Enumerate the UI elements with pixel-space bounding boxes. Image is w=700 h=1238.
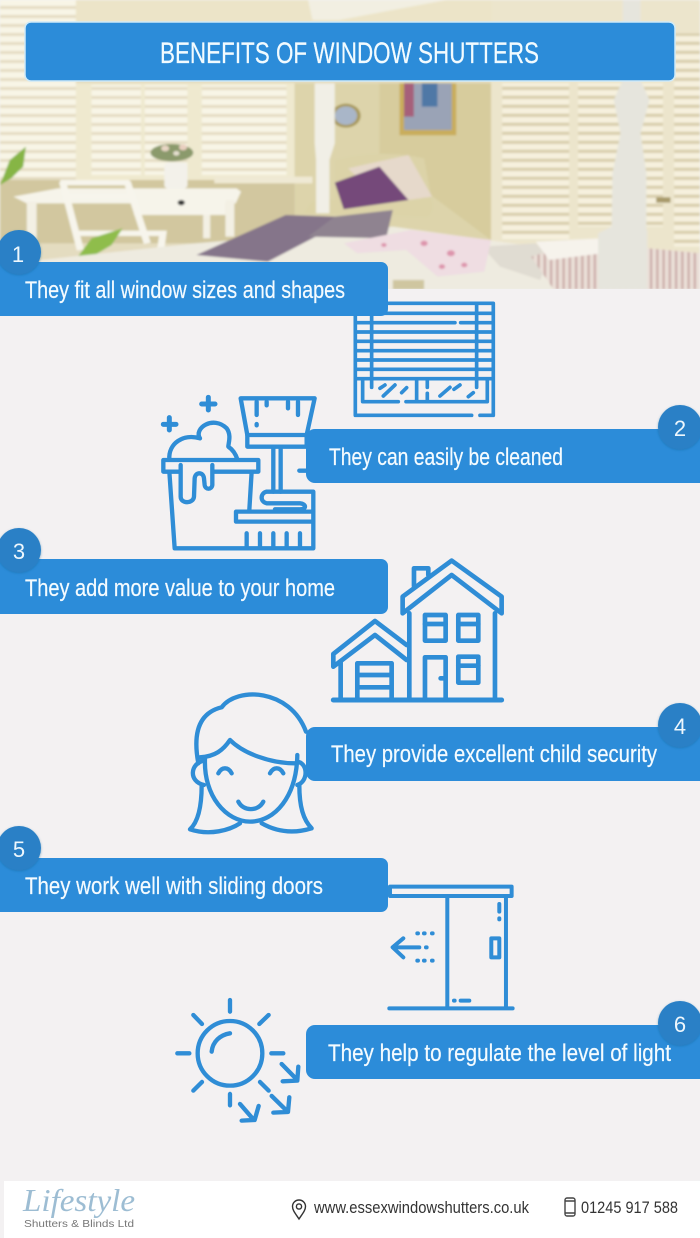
badge 3: 3 <box>13 539 25 564</box>
title banner <box>25 22 675 81</box>
phone number: 01245 917 588 <box>581 1198 678 1217</box>
photo: bedroom with shutters <box>0 0 700 289</box>
item 3 <box>0 528 388 614</box>
badge 5: 5 <box>13 837 25 862</box>
website: www.essexwindowshutters.co.uk <box>313 1198 529 1217</box>
grey pillows <box>196 215 335 262</box>
badge 3 <box>0 528 41 572</box>
badge 1 <box>0 230 41 274</box>
icon: window shutter <box>354 303 493 415</box>
item 5: They work well with sliding doors <box>25 873 323 900</box>
item 6 <box>306 1001 700 1079</box>
logo: Lifestyle <box>22 1182 135 1218</box>
post left <box>315 83 335 213</box>
badge 6: 6 <box>674 1012 686 1037</box>
icon: house <box>333 561 502 700</box>
desk <box>13 188 241 203</box>
item 1 <box>0 230 388 316</box>
icon: location pin <box>292 1200 306 1219</box>
item 5 <box>0 826 388 912</box>
painting <box>400 83 456 135</box>
item 1: They fit all window sizes and shapes <box>25 277 345 304</box>
floral blanket <box>344 230 491 277</box>
bed <box>38 226 553 289</box>
badge 2 <box>658 405 700 449</box>
badge 1: 1 <box>12 242 24 267</box>
icon: sliding door <box>389 887 513 1008</box>
badge 5 <box>0 826 41 870</box>
badge 4: 4 <box>674 714 686 739</box>
icon: cleaning bucket and brush <box>163 397 315 548</box>
leaves <box>0 147 26 185</box>
title: BENEFITS OF WINDOW SHUTTERS <box>160 37 539 70</box>
item 2 <box>306 405 700 483</box>
flowers <box>164 163 187 189</box>
item 4 <box>306 703 700 781</box>
badge 6 <box>658 1001 700 1045</box>
armchair <box>380 154 428 187</box>
badge 2: 2 <box>674 416 686 441</box>
footer <box>4 1181 700 1238</box>
item 3: They add more value to your home <box>25 575 335 602</box>
icon: sun with arrows <box>177 1000 298 1121</box>
logo: Shutters & Blinds Ltd <box>24 1218 134 1230</box>
badge 4 <box>658 703 700 747</box>
post right <box>598 0 650 289</box>
item 2: They can easily be cleaned <box>329 444 563 471</box>
icon: phone <box>565 1198 575 1216</box>
icon: child face <box>190 694 312 832</box>
